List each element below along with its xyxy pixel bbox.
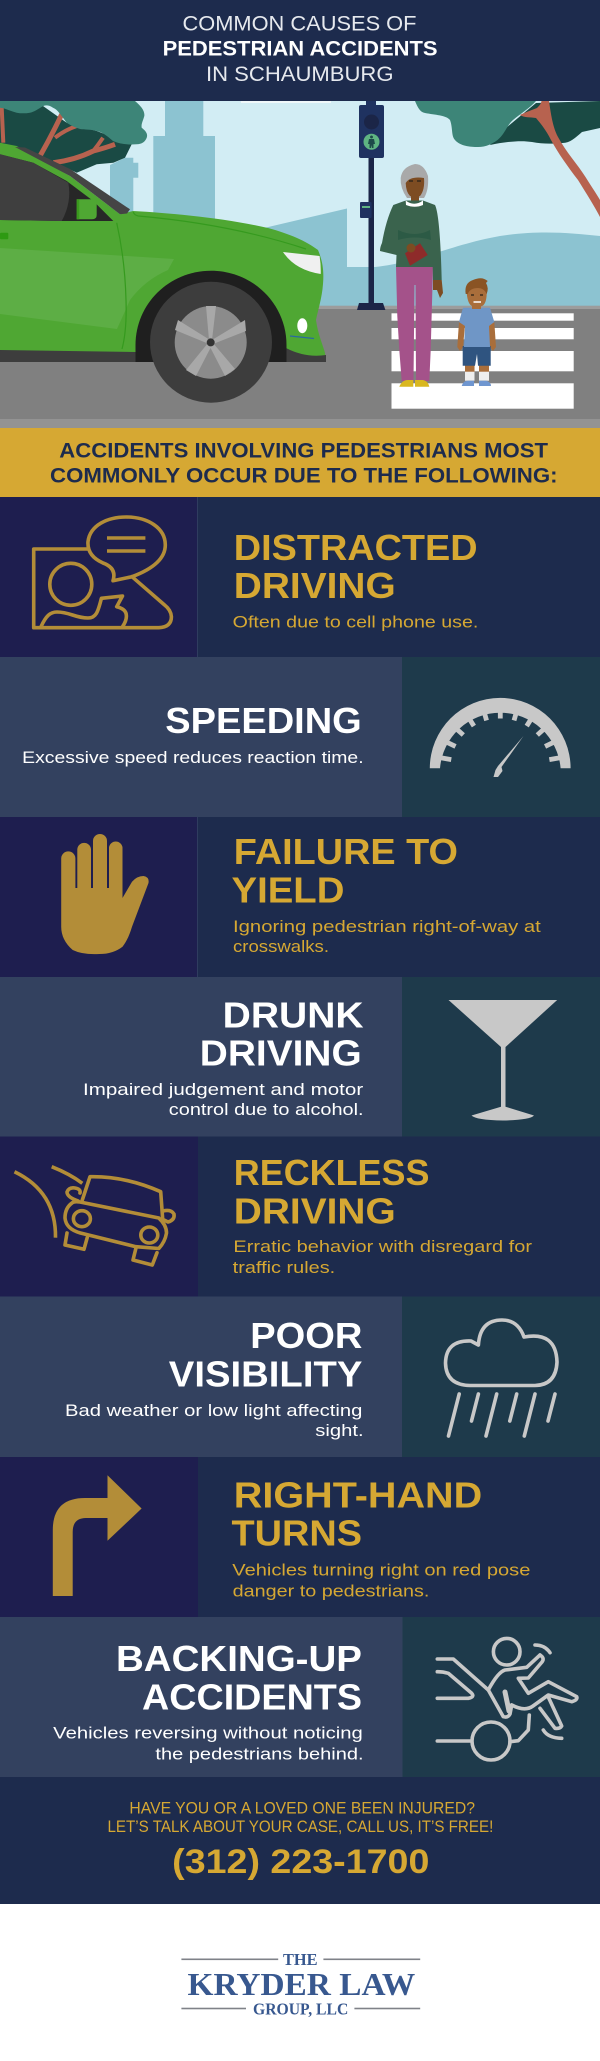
panel: failure to yield: [0, 817, 600, 977]
icon: right turn arrow: [53, 1475, 142, 1596]
panel: failure to yield: Ignoring pedestrian right-of-way at: [233, 917, 541, 936]
banner: lead-in heading: ACCIDENTS INVOLVING PEDESTRIANS MOST: [59, 440, 548, 463]
panel: poor visibility: POOR: [250, 1315, 362, 1356]
panel: backing-up accidents: Vehicles reversing without noticing: [53, 1723, 363, 1742]
icon: martini glass: [448, 1000, 557, 1120]
panel: distracted driving: [0, 497, 600, 657]
panel: poor visibility: sight.: [315, 1421, 364, 1440]
panel: poor visibility: Bad weather or low light affecting: [65, 1401, 362, 1420]
logo: The Kryder Law Group: THE: [283, 1950, 318, 1969]
icon: rain cloud: [446, 1320, 557, 1436]
panel: right-hand turns: danger to pedestrians.: [233, 1582, 429, 1600]
icon: raised hand: [61, 834, 149, 954]
road: [0, 306, 600, 428]
pedestrian signal: [357, 101, 385, 310]
footer call to action: LET’S TALK ABOUT YOUR CASE, CALL US, IT’S FREE!: [108, 1817, 493, 1836]
panel: reckless driving: [0, 1136, 600, 1296]
panel: speeding: SPEEDING: [165, 700, 362, 741]
logo: The Kryder Law Group: KRYDER LAW: [188, 1966, 415, 2002]
crosswalk: [392, 313, 574, 409]
left tree: [0, 101, 147, 173]
panel: poor visibility: [0, 1296, 600, 1457]
right tree: [415, 101, 600, 217]
panel: reckless driving: RECKLESS: [234, 1152, 429, 1193]
panel: drunk driving: control due to alcohol.: [169, 1100, 364, 1119]
panel: right-hand turns: Vehicles turning right on red pose: [232, 1560, 530, 1580]
panel: distracted driving: DRIVING: [234, 565, 396, 606]
panel: reckless driving: DRIVING: [234, 1191, 396, 1232]
panel: reckless driving: traffic rules.: [233, 1258, 335, 1277]
panel: drunk driving: Impaired judgement and motor: [83, 1080, 364, 1099]
panel: backing-up accidents: BACKING-UP: [116, 1638, 362, 1679]
icon: driver with phone and speech bubble: [34, 517, 171, 628]
logo: The Kryder Law Group: [181, 1950, 420, 2019]
panel: drunk driving: [0, 977, 600, 1137]
car: [0, 143, 326, 403]
panel: reckless driving: Erratic behavior with disregard for: [233, 1237, 532, 1256]
icon: pedestrian struck by car: [437, 1638, 577, 1760]
footer call to action: HAVE YOU OR A LOVED ONE BEEN INJURED?: [129, 1799, 475, 1818]
panel: distracted driving: DISTRACTED: [234, 527, 478, 568]
logo: The Kryder Law Group: GROUP, LLC: [253, 2000, 348, 2019]
panel: speeding: Excessive speed reduces reaction time.: [22, 748, 364, 767]
panel: speeding: [0, 657, 600, 817]
icon: speedometer: [430, 698, 571, 777]
panel: drunk driving: DRUNK: [223, 995, 364, 1036]
panel: right-hand turns: TURNS: [232, 1512, 362, 1554]
boy: [457, 278, 496, 386]
title: [0, 0, 600, 101]
panel: failure to yield: crosswalks.: [233, 937, 329, 956]
footer call to action: (312) 223-1700: [172, 1843, 429, 1881]
panel: backing-up accidents: ACCIDENTS: [142, 1676, 362, 1718]
title: IN SCHAUMBURG: [206, 62, 394, 86]
panel: drunk driving: DRIVING: [200, 1033, 362, 1074]
icon: skidding car: [14, 1167, 174, 1265]
background skyline: [110, 101, 600, 306]
panel: failure to yield: FAILURE TO: [234, 831, 458, 872]
wheel: [150, 282, 272, 403]
panel: right-hand turns: [0, 1457, 600, 1617]
woman: [380, 164, 443, 387]
panel: distracted driving: Often due to cell phone use.: [233, 613, 478, 632]
footer call to action: [0, 1777, 600, 1904]
panel: poor visibility: VISIBILITY: [169, 1354, 362, 1395]
panel: backing-up accidents: [0, 1617, 600, 1777]
banner: lead-in heading: [0, 428, 600, 497]
title: COMMON CAUSES OF: [182, 12, 416, 36]
street scene illustration: [0, 101, 600, 428]
panel: failure to yield: YIELD: [232, 870, 344, 911]
panel: backing-up accidents: the pedestrians behind.: [155, 1744, 364, 1763]
panel: right-hand turns: RIGHT-HAND: [234, 1475, 482, 1516]
banner: lead-in heading: COMMONLY OCCUR DUE TO THE FOLLOWING:: [50, 465, 558, 488]
title: PEDESTRIAN ACCIDENTS: [163, 37, 438, 61]
